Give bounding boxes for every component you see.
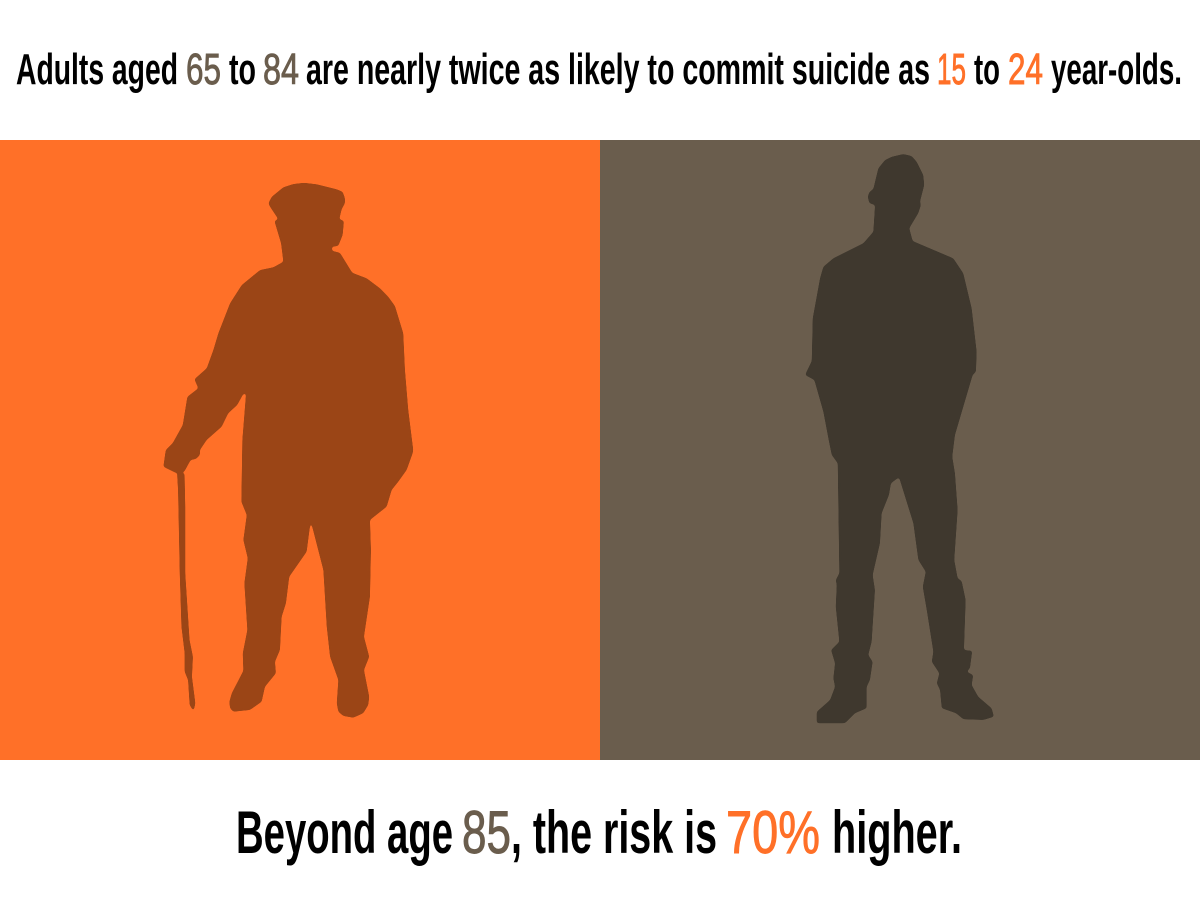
closing statement: age 85 risk: 85 [462, 799, 511, 866]
headline: ages 65 to 84 vs 15 to 24: 84 [263, 45, 299, 94]
headline: ages 65 to 84 vs 15 to 24: to [229, 45, 256, 94]
closing statement: age 85 risk: 70% [726, 799, 820, 866]
panel: younger adult [600, 140, 1200, 760]
silhouette: older man with cane [163, 183, 413, 718]
closing statement: age 85 risk [236, 799, 962, 866]
headline: ages 65 to 84 vs 15 to 24: 24 [1008, 45, 1043, 94]
panel: older adult [0, 140, 600, 760]
headline: ages 65 to 84 vs 15 to 24: 65 [186, 45, 221, 94]
closing statement: age 85 risk: higher. [832, 799, 962, 866]
closing statement: age 85 risk: Beyond age [236, 799, 453, 866]
headline: ages 65 to 84 vs 15 to 24: 15 [937, 45, 966, 94]
headline: ages 65 to 84 vs 15 to 24: to [974, 45, 1000, 94]
headline: ages 65 to 84 vs 15 to 24: Adults aged [16, 45, 178, 94]
silhouette: young man standing [805, 154, 994, 723]
closing statement: age 85 risk: , the risk is [511, 799, 717, 866]
